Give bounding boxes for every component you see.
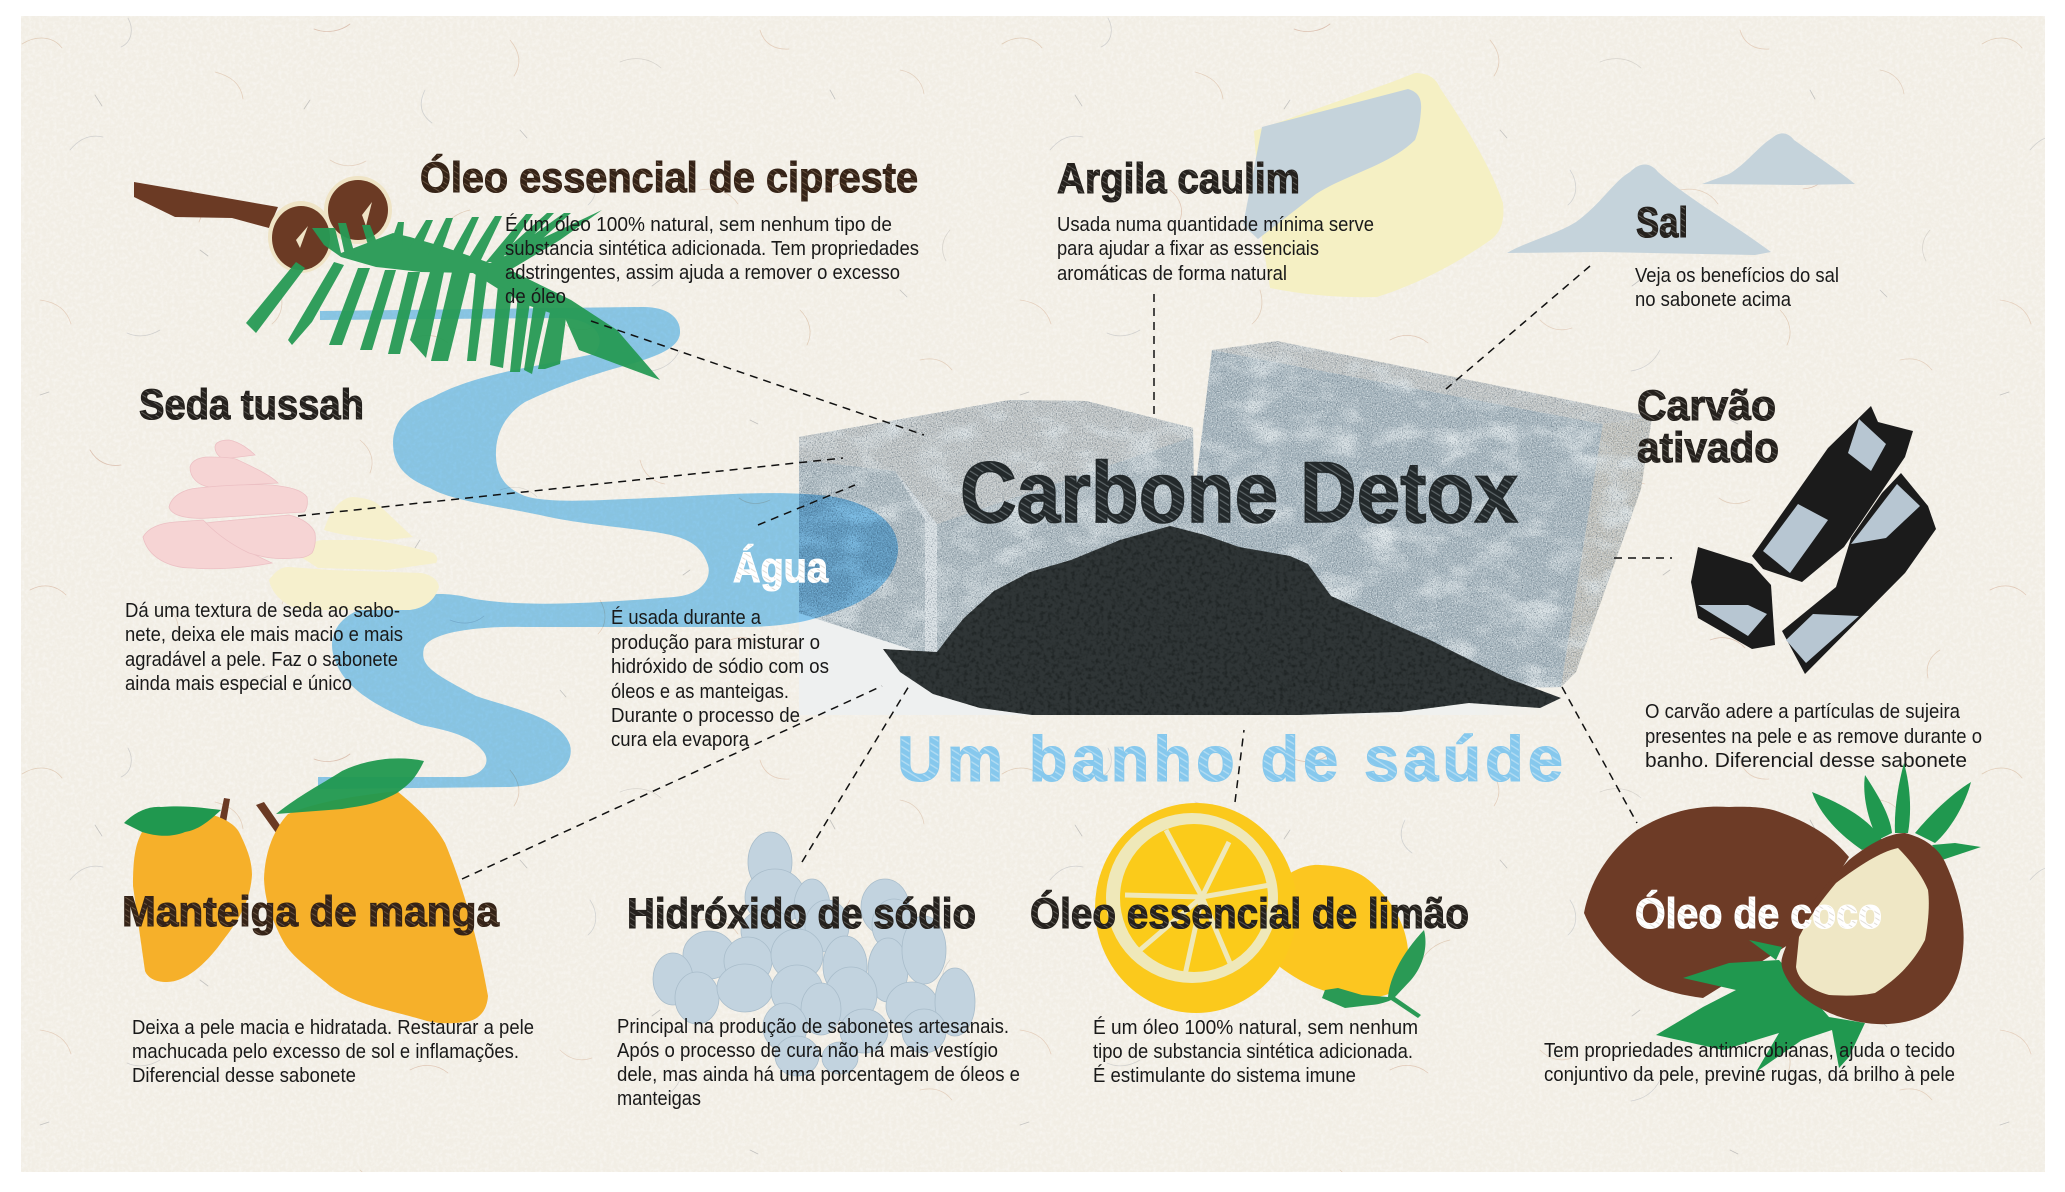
river: água [318,307,898,789]
charcoal powder pile [883,526,1561,715]
icon: coconut [1584,763,1981,1072]
text: argila description: Usada numa quantidade mínima serve [1057,214,1374,236]
text: limão description [1093,1016,1418,1087]
text: argila description [1057,214,1374,285]
icon: kaolin clay [1243,73,1503,297]
heading: seda tussah: Seda tussah [139,381,364,429]
text: cipreste description: substancia sintética adicionada. Tem propriedades [505,238,919,260]
text: manteiga description: Diferencial desse sabonete [132,1065,356,1087]
icon: mangoes [124,758,488,1023]
text: hidróxido description: Após o processo de cura não há mais vestígio [617,1040,998,1062]
text: água description [611,606,829,751]
heading: água: Água [733,544,829,592]
text: água description: É usada durante a [611,606,762,629]
text: seda description: ainda mais especial e único [125,673,352,695]
text: limão description: É um óleo 100% natural, sem nenhum [1093,1016,1418,1039]
text: água description: cura ela evapora [611,729,750,751]
text: água description: Durante o processo de [611,705,800,727]
text: cipreste description: de óleo [505,286,566,308]
text: cipreste description: adstringentes, assim ajuda a remover o excesso [505,262,900,284]
soap bar right [1182,341,1652,690]
subtitle: um banho de saúde: Um banho de saúde [897,723,1567,795]
heading: argila caulim: Argila caulim [1057,155,1300,203]
heading: carvão ativado: Carvão [1637,382,1776,430]
text: hidróxido description: Principal na produção de sabonetes artesanais. [617,1016,1009,1038]
icon: lemons [1095,803,1425,1018]
soap bar left [799,400,1195,654]
icon: activated charcoal pieces [1691,406,1936,674]
heading: hidróxido de sódio: Hidróxido de sódio [627,890,976,938]
text: carvão description: O carvão adere a partículas de sujeira [1645,701,1961,723]
dashed connector lines [298,266,1672,879]
text: limão description: É estimulante do sistema imune [1093,1064,1356,1087]
heading: óleo de coco: Óleo de coco [1635,889,1882,938]
text: cipreste description [505,213,919,308]
text: carvão description: presentes na pele e as remove durante o [1645,726,1982,748]
text: seda description [125,600,403,695]
heading: óleo essencial de cipreste: Óleo essencial de cipreste [420,153,918,202]
icon: sodium hydroxide pebbles [653,832,975,1076]
text: coco description [1544,1040,1955,1086]
text: hidróxido description [617,1016,1020,1110]
text: sal description: no sabonete acima [1635,289,1792,311]
text: carvão description: banho. Diferencial desse sabonete [1645,750,1967,772]
text: água description: hidróxido de sódio com os [611,656,829,678]
text: seda description: nete, deixa ele mais macio e mais [125,624,403,646]
text: seda description: agradável a pele. Faz o sabonete [125,649,398,671]
icon: cypress branch brown stem and cones [134,176,392,273]
text: hidróxido description: manteigas [617,1088,701,1110]
text: manteiga description: Deixa a pele macia e hidratada. Restaurar a pele [132,1017,534,1039]
icon: cypress fern leaf [246,210,660,380]
text: coco description: Tem propriedades antimicrobianas, ajuda o tecido [1544,1040,1955,1062]
heading: óleo essencial de limão: Óleo essencial de limão [1030,889,1469,938]
text: limão description: tipo de substancia sintética adicionada. [1093,1041,1413,1063]
heading: sal: Sal [1636,199,1688,247]
text: carvão description [1645,701,1982,772]
title: carbone detox: Carbone Detox [960,445,1518,541]
text: coco description: conjuntivo da pele, previne rugas, dá brilho à pele [1544,1064,1955,1086]
icon: tussah silk tufts [143,440,439,610]
photo: soap bars and charcoal powder [799,341,1652,715]
text: manteiga description: machucada pelo excesso de sol e inflamações. [132,1041,519,1063]
text: argila description: para ajudar a fixar as essenciais [1057,238,1319,260]
text: água description: produção para misturar o [611,632,820,654]
heading: carvão ativado [1637,382,1779,472]
text: hidróxido description: dele, mas ainda há uma porcentagem de óleos e [617,1064,1020,1086]
icon: salt mounds [1507,133,1855,255]
text: sal description [1635,265,1839,311]
photo floor [799,612,1640,715]
text: água description: óleos e as manteigas. [611,681,789,703]
text: cipreste description: É um óleo 100% natural, sem nenhum tipo de [505,213,892,236]
text: argila description: aromáticas de forma natural [1057,263,1287,285]
text: sal description: Veja os benefícios do sal [1635,265,1839,287]
heading: carvão ativado: ativado [1637,424,1779,472]
text: seda description: Dá uma textura de seda ao sabo- [125,600,400,622]
heading: manteiga de manga: Manteiga de manga [122,888,500,936]
text: manteiga description [132,1017,534,1087]
